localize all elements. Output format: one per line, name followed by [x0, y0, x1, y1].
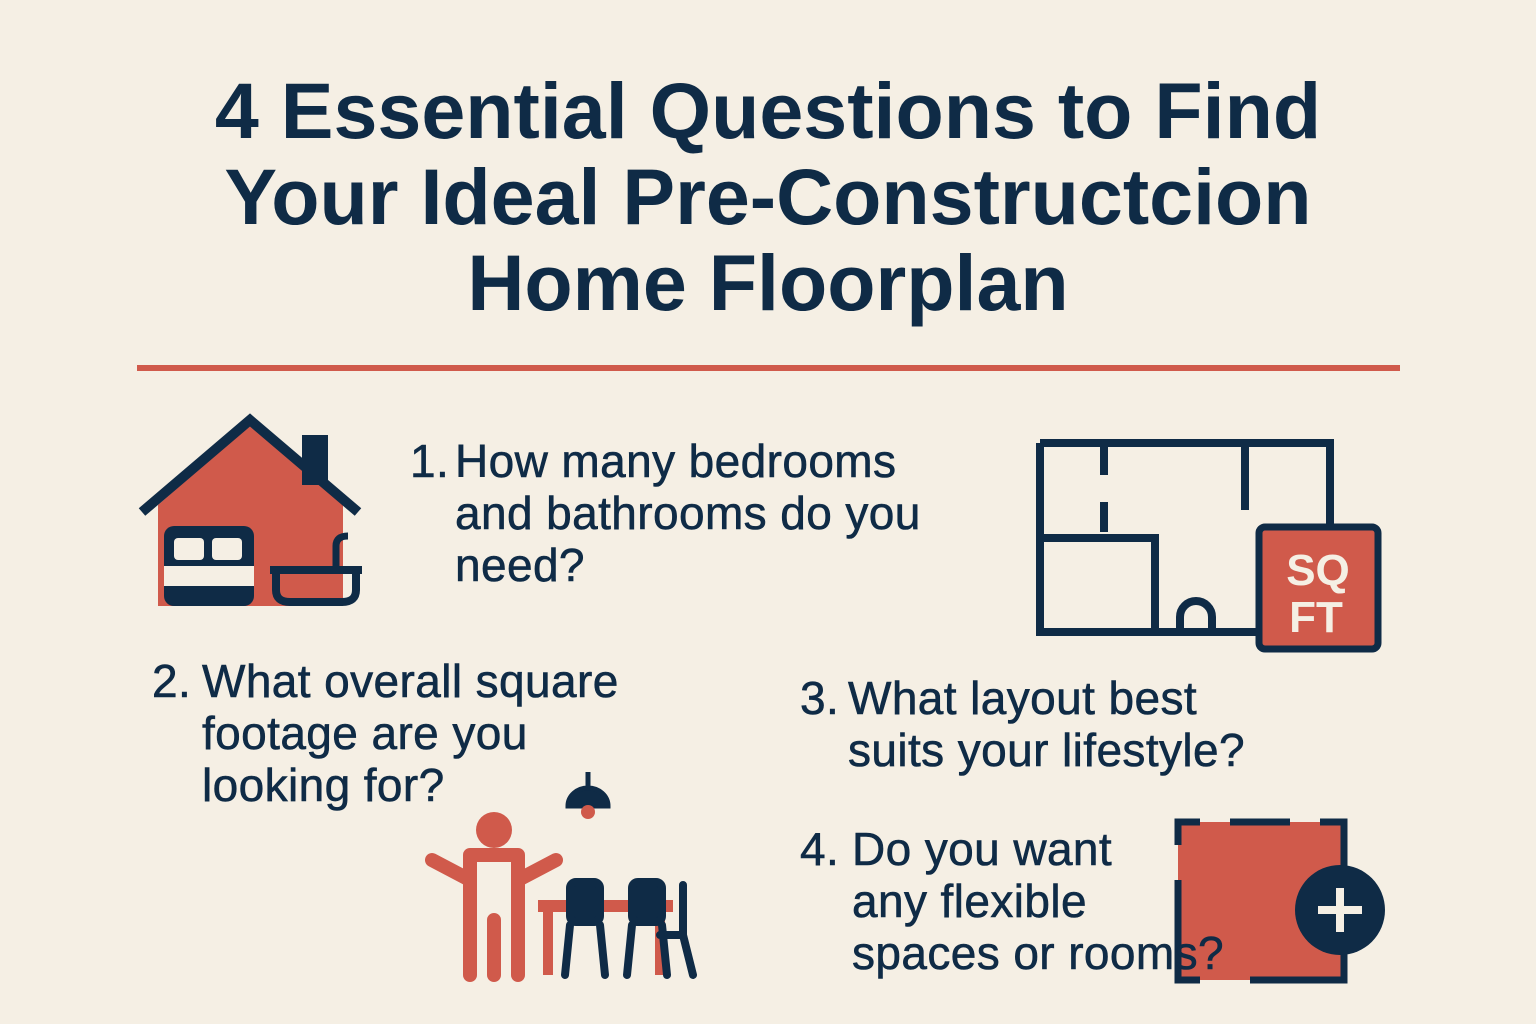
question 1: need? — [455, 539, 585, 591]
icon: house with bed and bath — [138, 413, 362, 606]
title: Your Ideal Pre-Constructcion — [224, 152, 1312, 241]
question 3 — [800, 672, 1245, 776]
question 4: 4. — [800, 823, 839, 875]
question 1: How many bedrooms — [455, 435, 896, 487]
divider — [137, 365, 1400, 371]
question 2: looking for? — [202, 759, 445, 811]
question 2 — [152, 655, 619, 811]
icon: flexible room with plus — [1174, 818, 1385, 984]
icon: floorplan with SQ FT: FT — [1289, 593, 1343, 642]
icon: floorplan with SQ FT: SQ — [1286, 546, 1350, 595]
question 3: suits your lifestyle? — [848, 724, 1245, 776]
question 3: What layout best — [848, 672, 1197, 724]
question 1 — [410, 435, 921, 591]
icon: person at dining table — [425, 772, 697, 982]
title: 4 Essential Questions to Find — [215, 66, 1321, 155]
question 1: and bathrooms do you — [455, 487, 921, 539]
question 2: 2. — [152, 655, 191, 707]
question 2: What overall square — [202, 655, 619, 707]
title — [215, 66, 1321, 327]
title: Home Floorplan — [467, 238, 1069, 327]
icon: floorplan with SQ FT — [1036, 439, 1382, 652]
question 4 — [800, 823, 1224, 979]
question 4: Do you want — [852, 823, 1112, 875]
question 4: spaces or rooms? — [852, 927, 1224, 979]
question 2: footage are you — [202, 707, 528, 759]
question 1: 1. — [410, 435, 449, 487]
question 3: 3. — [800, 672, 839, 724]
question 4: any flexible — [852, 875, 1087, 927]
